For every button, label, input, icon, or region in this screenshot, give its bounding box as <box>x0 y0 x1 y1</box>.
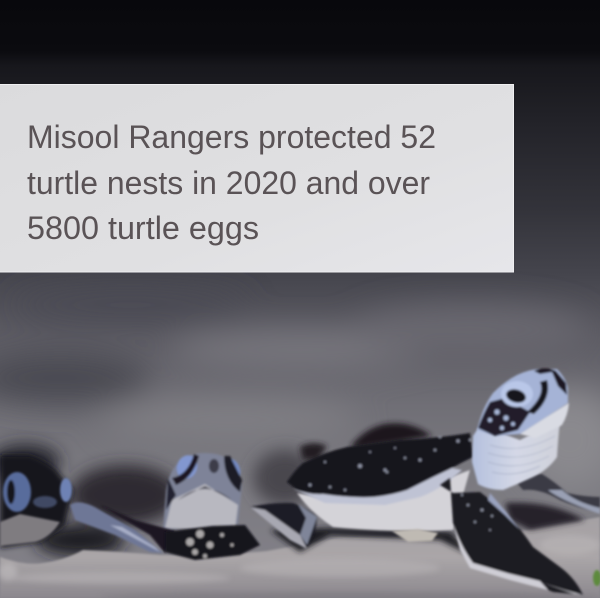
dark shadow behind hatchlings <box>0 444 317 556</box>
plastron <box>297 470 470 531</box>
head <box>477 368 569 438</box>
panel text: turtle nest statistics: 5800 turtle eggs <box>27 210 259 246</box>
left turtle rear flipper <box>165 525 260 560</box>
far turtle behind <box>300 423 432 460</box>
front flipper <box>440 478 583 595</box>
panel text: turtle nest statistics <box>27 119 436 246</box>
turtle ground shadow <box>270 503 585 560</box>
rear left flipper <box>250 503 317 549</box>
panel text: turtle nest statistics: Misool Rangers protected 52 <box>27 119 436 155</box>
left turtle head <box>0 455 73 548</box>
text panel <box>0 84 514 272</box>
left turtle front flipper <box>70 502 175 553</box>
left turtle hatchling <box>0 455 260 560</box>
shell <box>287 433 473 505</box>
middle turtle eyes <box>173 452 201 482</box>
leaf fragment <box>593 570 600 586</box>
middle turtle body <box>163 453 242 530</box>
belly sand clump <box>392 529 438 542</box>
middle turtle neck and chin <box>165 484 238 530</box>
sand foreground <box>0 517 600 598</box>
middle turtle hatchling <box>163 452 243 530</box>
rear right flipper <box>517 474 600 514</box>
main turtle hatchling <box>250 368 600 595</box>
panel text: turtle nest statistics: turtle nests in 2020 and over <box>27 165 430 201</box>
neck <box>472 420 560 490</box>
